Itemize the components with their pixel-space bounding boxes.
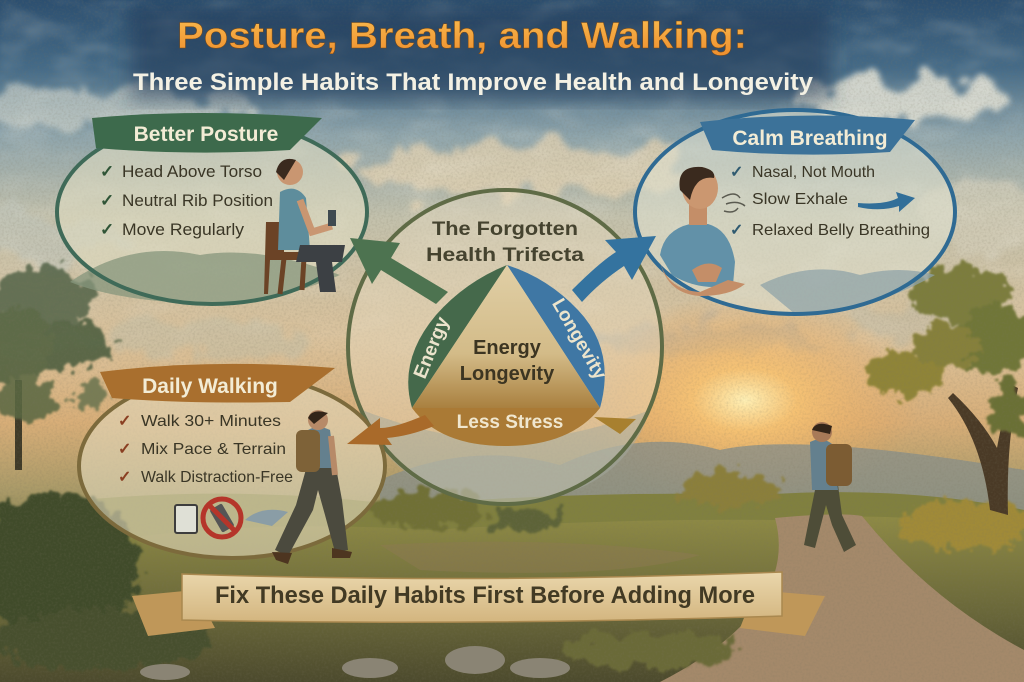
figure: seated man with phone <box>264 159 345 294</box>
icon: no phone <box>175 499 288 537</box>
checklist: posture: ✓ <box>100 162 114 181</box>
label: longevity: Longevity <box>547 295 611 384</box>
heading: daily walking: Daily Walking <box>142 375 278 398</box>
clouds <box>0 78 1024 360</box>
arrow: right stub <box>594 417 636 434</box>
checklist: breathing: Nasal, Not Mouth <box>752 164 875 181</box>
checklist: breathing: ✓ <box>730 164 743 181</box>
arrow: to calm breathing <box>572 236 656 302</box>
heading: calm breathing <box>700 115 915 155</box>
figure: breathing man <box>660 167 745 296</box>
checklist: breathing: ✓ <box>730 222 743 239</box>
checklist: posture: Head Above Torso <box>122 162 262 181</box>
checklist: breathing: Relaxed Belly Breathing <box>752 222 930 239</box>
center circle <box>348 190 662 504</box>
checklist: walking: ✓ <box>118 469 131 486</box>
tree left <box>0 268 113 470</box>
title: Posture, Breath, and Walking: <box>177 15 747 56</box>
label: center: Energy <box>473 337 542 359</box>
checklist: posture <box>100 162 273 239</box>
figure: distant walker <box>804 422 856 552</box>
ground <box>0 517 1024 682</box>
heading: calm breathing: Calm Breathing <box>732 127 888 150</box>
distant hills <box>0 442 1024 600</box>
checklist: posture: Move Regularly <box>122 220 245 239</box>
checklist: walking: ✓ <box>118 413 131 430</box>
arrow: to daily walking <box>347 415 434 445</box>
checklist: walking: Mix Pace & Terrain <box>141 441 286 458</box>
sky mottling <box>0 0 1023 293</box>
title: Three Simple Habits That Improve Health and Longevity <box>133 69 814 96</box>
heading: forgotten health trifecta <box>426 219 585 266</box>
checklist: walking: ✓ <box>118 441 131 458</box>
heading: forgotten health trifecta: The Forgotten <box>432 219 578 240</box>
heading: forgotten health trifecta: Health Trifecta <box>426 245 585 266</box>
heading: better posture: Better Posture <box>134 123 278 146</box>
heading: daily walking <box>100 364 335 402</box>
tree right <box>863 267 1024 515</box>
checklist: breathing <box>730 164 930 239</box>
trifecta triangle: Longevity <box>460 363 555 385</box>
banner text: Fix These Daily Habits First Before Adding More <box>215 582 755 609</box>
heading: better posture <box>92 113 322 153</box>
checklist: breathing: Slow Exhale <box>752 191 848 208</box>
bushes <box>0 472 1024 670</box>
sun glow <box>570 295 920 505</box>
checklist: walking <box>118 413 293 486</box>
checklist: posture: Neutral Rib Position <box>122 191 273 210</box>
banner <box>132 572 825 636</box>
checklist: walking: Walk Distraction-Free <box>141 469 293 486</box>
label: less stress: Less Stress <box>457 412 563 433</box>
panel: better posture <box>57 113 367 304</box>
checklist: posture: ✓ <box>100 191 114 210</box>
rocks <box>140 646 570 680</box>
checklist: walking: Walk 30+ Minutes <box>141 413 281 430</box>
panel: daily walking <box>79 364 385 558</box>
figure: walker with backpack foreground <box>272 410 352 564</box>
icon: exhale arrow <box>858 192 915 212</box>
path <box>660 514 1024 682</box>
label: energy: Energy <box>410 314 454 382</box>
icon: breath puff <box>722 194 745 212</box>
checklist: posture: ✓ <box>100 220 114 239</box>
arrow: to better posture <box>350 238 448 304</box>
trifecta triangle <box>408 265 611 446</box>
panel: calm breathing <box>635 110 955 314</box>
title <box>130 8 830 100</box>
